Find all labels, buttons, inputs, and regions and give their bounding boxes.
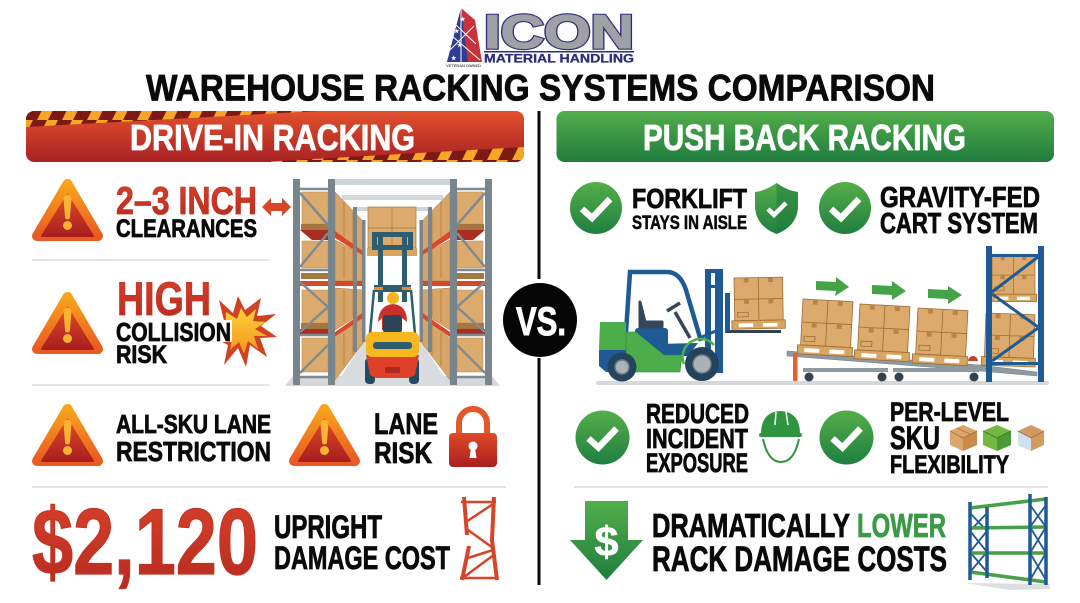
ramp and carts [787,351,1037,382]
logo: VETERAN OWNED [446,63,481,68]
text: damage cost: DAMAGE COST [274,540,450,576]
icon: warning collision [37,297,98,349]
logo: ICON [484,5,634,58]
illustration: drive-in rack with forklift [285,179,500,386]
icon: collision burst [200,296,277,367]
icon: lock [449,409,497,467]
illustration: push back forklift and rack [596,246,1049,385]
icon: green rack [965,494,1050,590]
logo: ICON [484,5,634,58]
arrow: double headed clearance [262,198,291,216]
text: collision: COLLISION [116,317,231,347]
text: stays in aisle: STAYS IN AISLE [632,212,747,234]
icon: check gravity [819,182,871,234]
text: dramatically lower: DRAMATICALLY [652,507,850,544]
icon: warning clearances [37,184,98,236]
panel: drive-in racking header [26,111,524,162]
text: gravity-fed: GRAVITY-FED [880,182,1040,214]
icon: broken upright [460,497,498,580]
icon: shield [755,183,798,234]
icon: sku cartons [950,425,1044,451]
green push arrows [816,277,962,304]
icon: down arrow dollar: $ [594,518,618,565]
logo [446,5,634,68]
text: exposure: EXPOSURE [646,448,748,478]
icon: hard hat [759,411,802,462]
logo: ★ [457,42,463,49]
icon: check incident [576,410,630,464]
text: per-level: PER-LEVEL [890,397,1009,427]
storage rack [981,246,1044,382]
logo: ★ [454,28,460,35]
text: clearances: CLEARANCES [116,215,257,243]
text: rack damage costs: RACK DAMAGE COSTS [652,540,947,579]
vs badge: VS. [516,300,566,344]
panel: push back racking header [556,111,1054,162]
text: $2,120: $2,120 [32,489,258,594]
logo: ★ [451,55,457,62]
text: sku: SKU [890,420,940,456]
text: restriction: RESTRICTION [116,436,271,467]
text: risk: RISK [116,341,167,369]
text: lower: LOWER [857,507,946,544]
text: forklift: FORKLIFT [632,183,747,214]
text: flexibility: FLEXIBILITY [890,451,1009,479]
text: reduced: REDUCED [646,398,749,429]
text: incident: INCIDENT [646,423,748,454]
title: WAREHOUSE RACKING SYSTEMS COMPARISON [146,68,935,108]
text: upright: UPRIGHT [274,509,382,545]
text: risk: RISK [374,437,432,470]
panel: drive-in racking header: DRIVE-IN RACKING [130,117,415,158]
text: lane: LANE [374,408,438,441]
icon: warning lane risk [294,409,355,461]
icon: down arrow dollar [570,501,643,580]
logo: ★ [460,16,466,23]
icon: check forklift [570,182,622,234]
center divider [538,111,540,585]
logo: MATERIAL HANDLING [484,54,634,66]
panel: push back racking header: PUSH BACK RACKING [643,117,966,158]
icon: warning lane restriction [37,409,98,461]
text: high: HIGH [117,272,211,325]
pallets of cartons [797,299,970,366]
forklift [599,269,785,382]
vs badge [503,283,577,357]
text: all-sku lane: ALL-SKU LANE [116,409,271,439]
text: 2-3 inch: 2–3 INCH [116,180,257,223]
icon: check sku [820,410,874,464]
